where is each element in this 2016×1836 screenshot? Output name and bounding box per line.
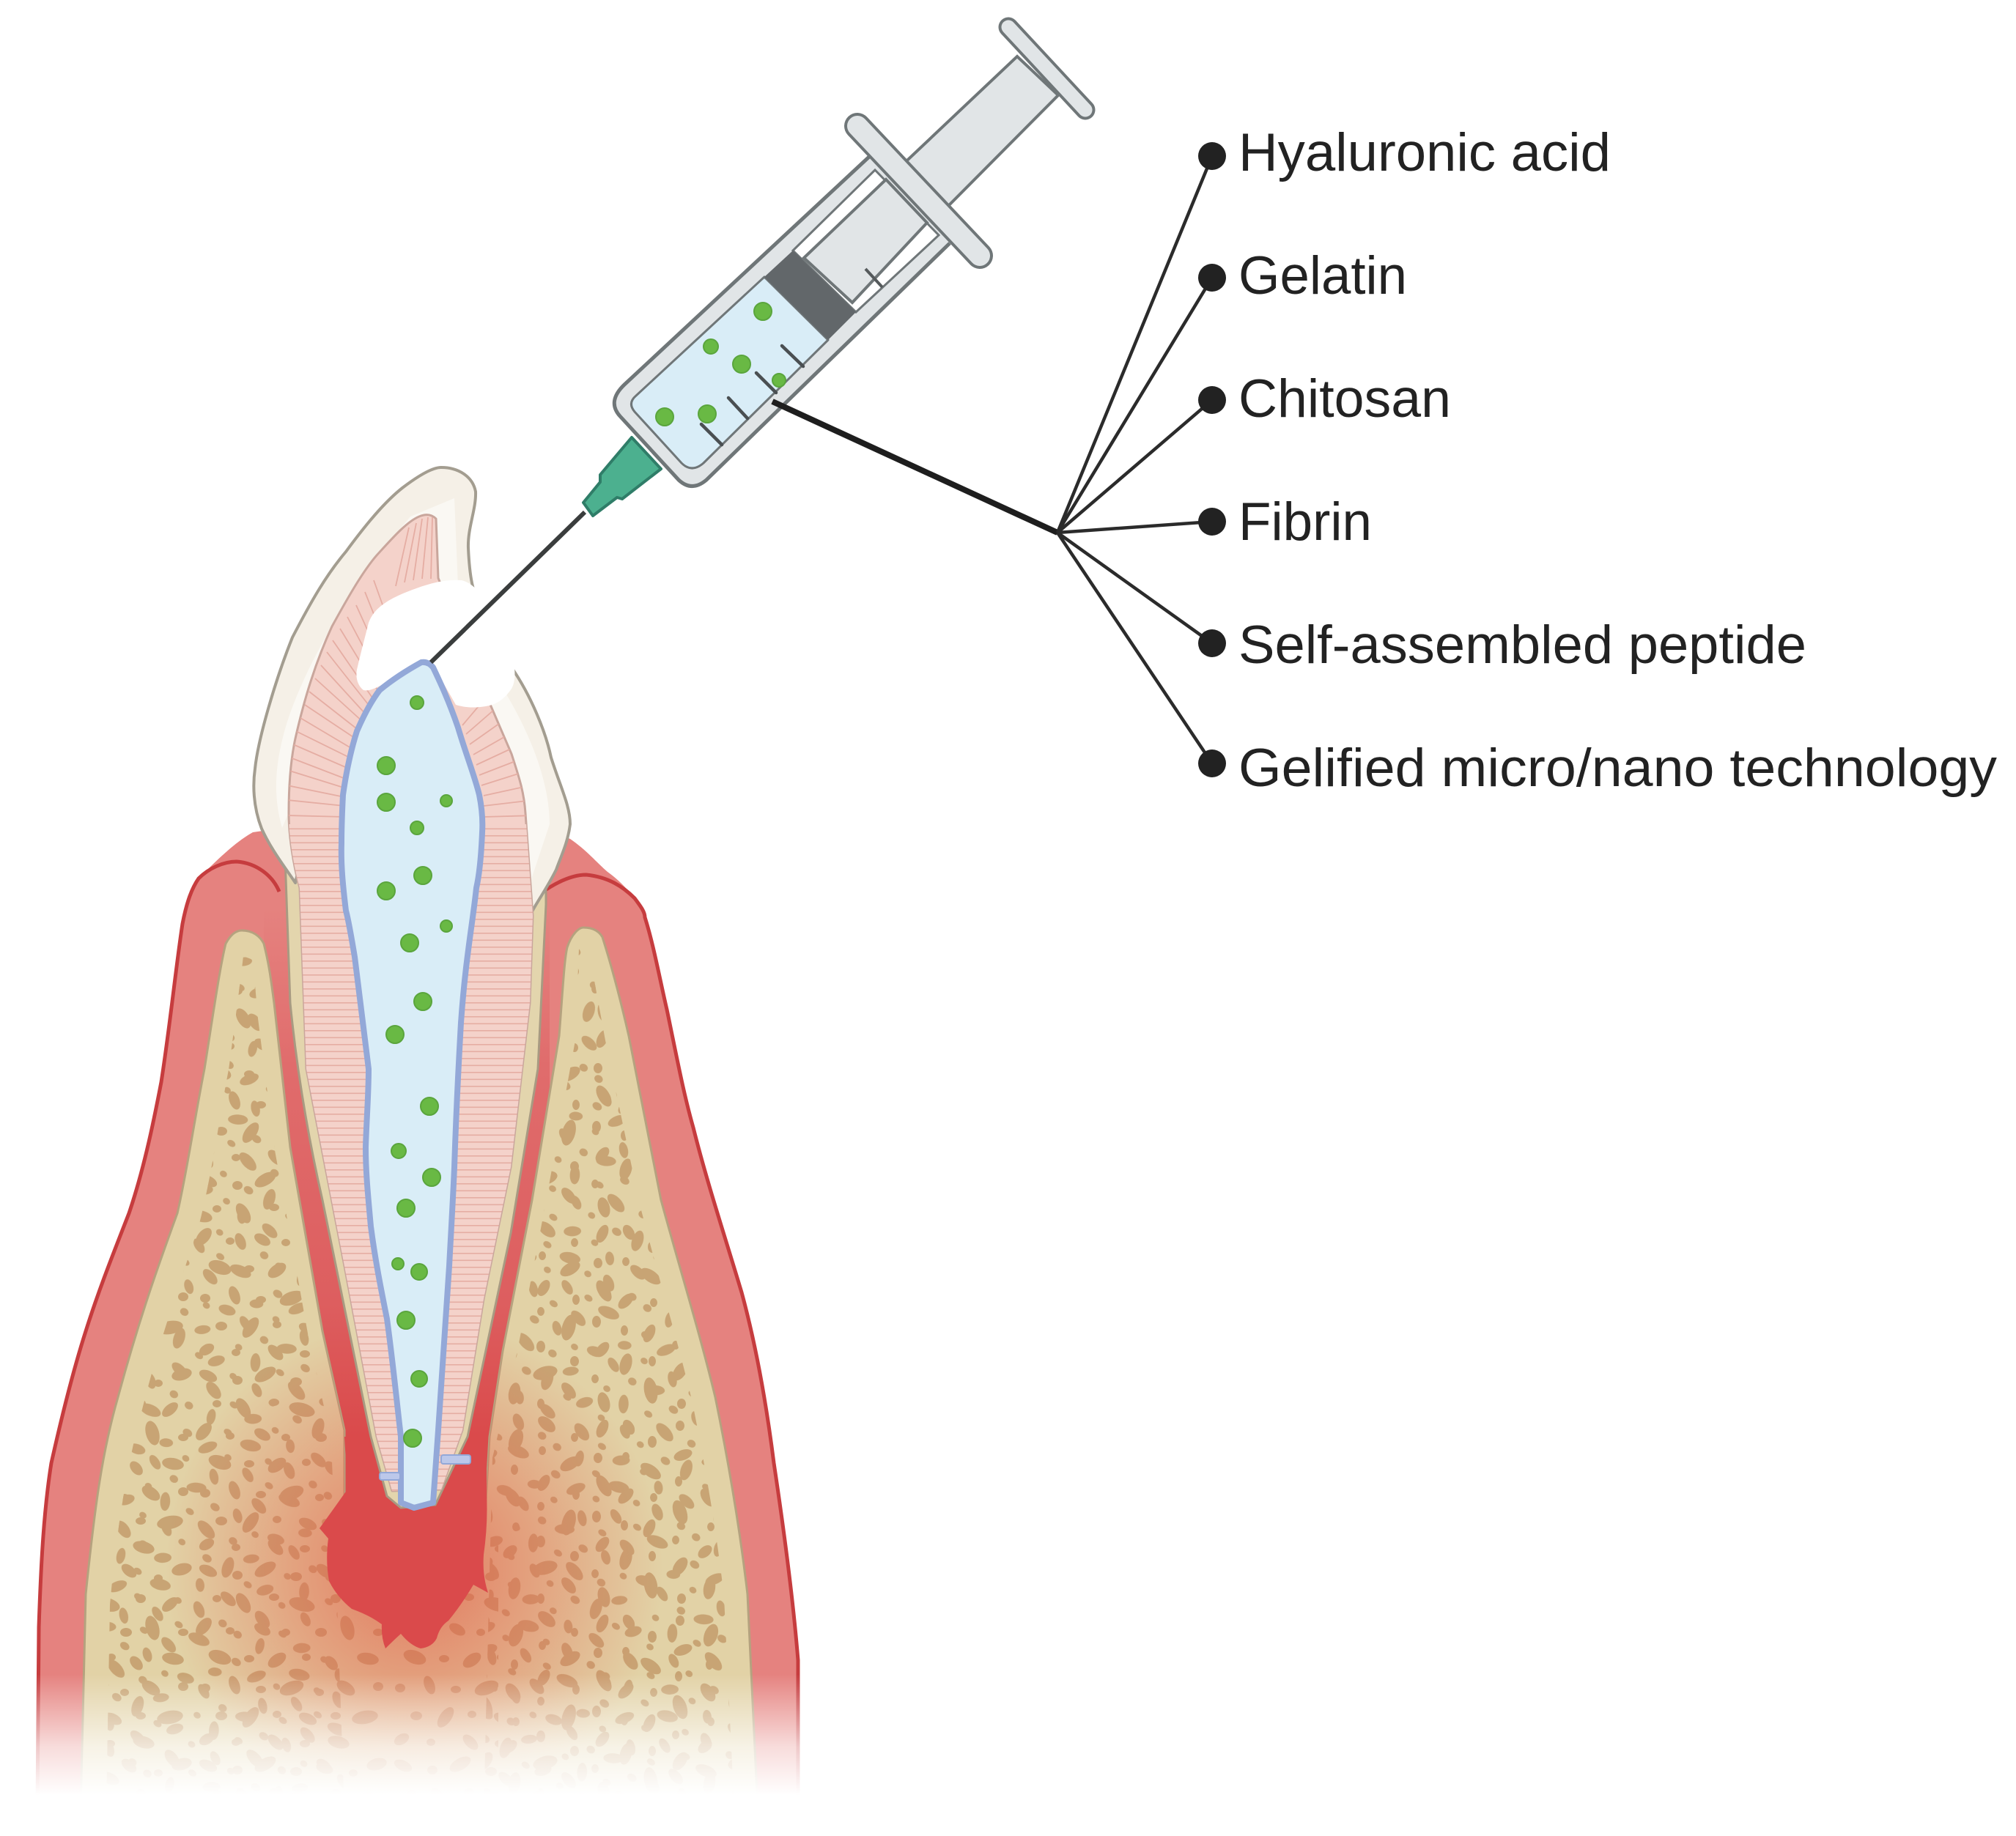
syringe hub [583,437,661,516]
gum tissue [37,824,798,1810]
plunger rod inside barrel [804,179,927,303]
syringe fluid particles [656,303,786,426]
fan of connector lines [1057,156,1212,763]
material list [1198,123,1998,798]
item: gelatin: Gelatin [1238,246,1407,306]
barrel [614,157,950,486]
spongy bone texture: under apex [322,1531,498,1810]
tooth root: cementum layer [285,857,546,1508]
inflammation halo around apex [187,1358,642,1744]
item: gelified micro/nano technology: Gelified micro/nano technology [1238,739,1998,798]
syringe [431,27,1085,662]
plunger rod [804,56,1058,303]
item: chitosan: Chitosan [1238,369,1451,429]
spongy bone texture: right, second layer [484,949,734,1810]
root tubules [278,824,542,1495]
finger flange [857,126,980,256]
graduation ticks [701,346,803,445]
tooth crown: enamel [254,467,570,916]
spongy bone texture: left, second layer [106,956,344,1810]
item: hyaluronic acid: Hyaluronic acid [1238,123,1611,182]
bottom fade [15,1674,821,1836]
barrel empty section [793,170,939,312]
barrel fluid [631,277,828,468]
root canal filled with hydrogel [341,662,482,1508]
syringe needle [431,512,585,662]
plunger stopper [764,251,856,340]
periapical lesion [320,1437,488,1648]
apical lilac seal marks [380,1455,470,1480]
item: self-assembled peptide: Self-assembled peptide [1238,615,1806,675]
alveolar bone [81,928,762,1810]
spongy bone texture: left [106,956,344,1810]
hydrogel particles in canal [377,696,452,1447]
callout stem from syringe to fan [772,401,1057,533]
plunger tick [865,269,882,287]
spongy bone texture: right [484,949,734,1810]
access cavity: white filling [356,580,514,708]
item: fibrin: Fibrin [1238,492,1372,552]
dentin with tubules [278,515,542,1495]
plunger thumb rest [1008,27,1085,110]
crown tubules [287,517,535,817]
